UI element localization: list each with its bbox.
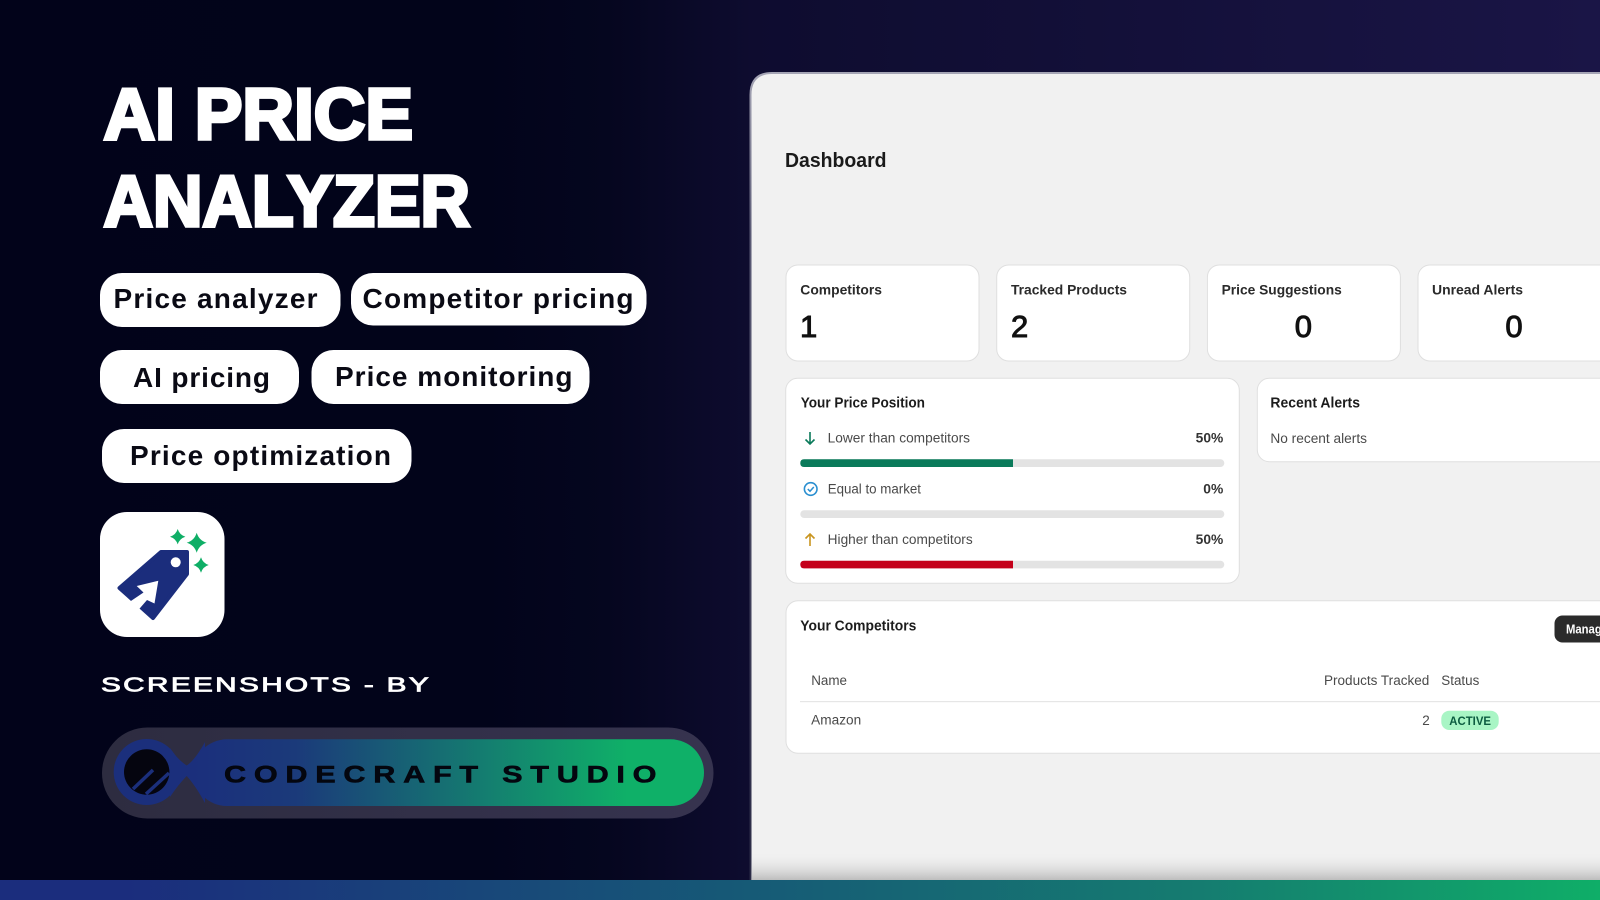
stat card: unread alerts: Unread Alerts bbox=[1432, 281, 1523, 297]
table header: Name bbox=[811, 673, 847, 688]
table header bbox=[811, 673, 1480, 688]
chip: AI pricing bbox=[100, 350, 299, 404]
chip: price monitoring bbox=[312, 350, 590, 404]
table row: amazon bbox=[811, 711, 1499, 730]
row: lower than competitors: Lower than competitors bbox=[828, 431, 970, 446]
stat card: price suggestions: 0 bbox=[1295, 309, 1312, 344]
card: your price position: Your Price Position bbox=[801, 395, 925, 411]
row: lower than competitors: 50% bbox=[1196, 431, 1223, 446]
stat card: competitors bbox=[786, 265, 979, 361]
stat card: tracked products bbox=[997, 265, 1190, 361]
bottom gradient bar bbox=[0, 880, 1600, 900]
row: higher than competitors: 50% bbox=[1196, 532, 1223, 547]
row: higher than competitors bbox=[800, 532, 1224, 568]
chip: price analyzer: Price analyzer bbox=[114, 283, 318, 314]
row: equal to market bbox=[800, 481, 1224, 518]
studio name pill bbox=[194, 739, 704, 806]
chip: competitor pricing bbox=[351, 273, 646, 326]
row: higher than competitors: Higher than competitors bbox=[828, 532, 973, 547]
icon: app price tag with sparkles bbox=[100, 512, 224, 637]
studio badge bbox=[102, 728, 714, 818]
stat card: competitors: Competitors bbox=[800, 281, 882, 297]
chip: price optimization: Price optimization bbox=[130, 440, 391, 471]
stat card: unread alerts bbox=[1418, 265, 1600, 361]
chip: price analyzer bbox=[100, 273, 340, 327]
chip: price monitoring: Price monitoring bbox=[335, 361, 572, 392]
logo mark bbox=[114, 739, 205, 805]
card: recent alerts: Recent Alerts bbox=[1270, 395, 1360, 411]
chip: AI pricing: AI pricing bbox=[133, 362, 270, 393]
table header: Products Tracked bbox=[1324, 673, 1429, 688]
screenshots by label: SCREENSHOTS - BY bbox=[101, 674, 429, 696]
table row: amazon: ACTIVE bbox=[1449, 714, 1491, 728]
stat card: competitors: 1 bbox=[800, 309, 817, 344]
stat card: price suggestions bbox=[1207, 265, 1400, 361]
card: your competitors bbox=[786, 601, 1600, 753]
card: recent alerts bbox=[1257, 378, 1600, 462]
stat card: tracked products: 2 bbox=[1011, 309, 1028, 344]
table header: Status bbox=[1441, 673, 1480, 688]
title: AI PRICE bbox=[104, 75, 413, 155]
card: recent alerts: No recent alerts bbox=[1270, 431, 1367, 446]
tag chips bbox=[100, 273, 646, 483]
panel: dashboard screenshot bbox=[750, 73, 1600, 880]
studio name pill: CODECRAFT STUDIO bbox=[224, 760, 657, 788]
table row: amazon: 2 bbox=[1422, 713, 1430, 728]
dashboard heading: Dashboard bbox=[785, 150, 886, 172]
row: equal to market: 0% bbox=[1203, 481, 1223, 496]
card: your price position bbox=[786, 378, 1239, 583]
card: your competitors: Your Competitors bbox=[800, 618, 916, 634]
title bbox=[104, 75, 470, 242]
chip: price optimization bbox=[102, 429, 412, 483]
title: ANALYZER bbox=[104, 162, 470, 242]
row: equal to market: Equal to market bbox=[828, 481, 921, 496]
stat card: unread alerts: 0 bbox=[1505, 309, 1523, 344]
stat card: tracked products: Tracked Products bbox=[1011, 281, 1127, 297]
table row: amazon: Amazon bbox=[811, 713, 861, 728]
manage button bbox=[1554, 616, 1600, 642]
stat card: price suggestions: Price Suggestions bbox=[1222, 281, 1342, 297]
row: lower than competitors bbox=[800, 431, 1224, 467]
chip: competitor pricing: Competitor pricing bbox=[362, 283, 634, 314]
